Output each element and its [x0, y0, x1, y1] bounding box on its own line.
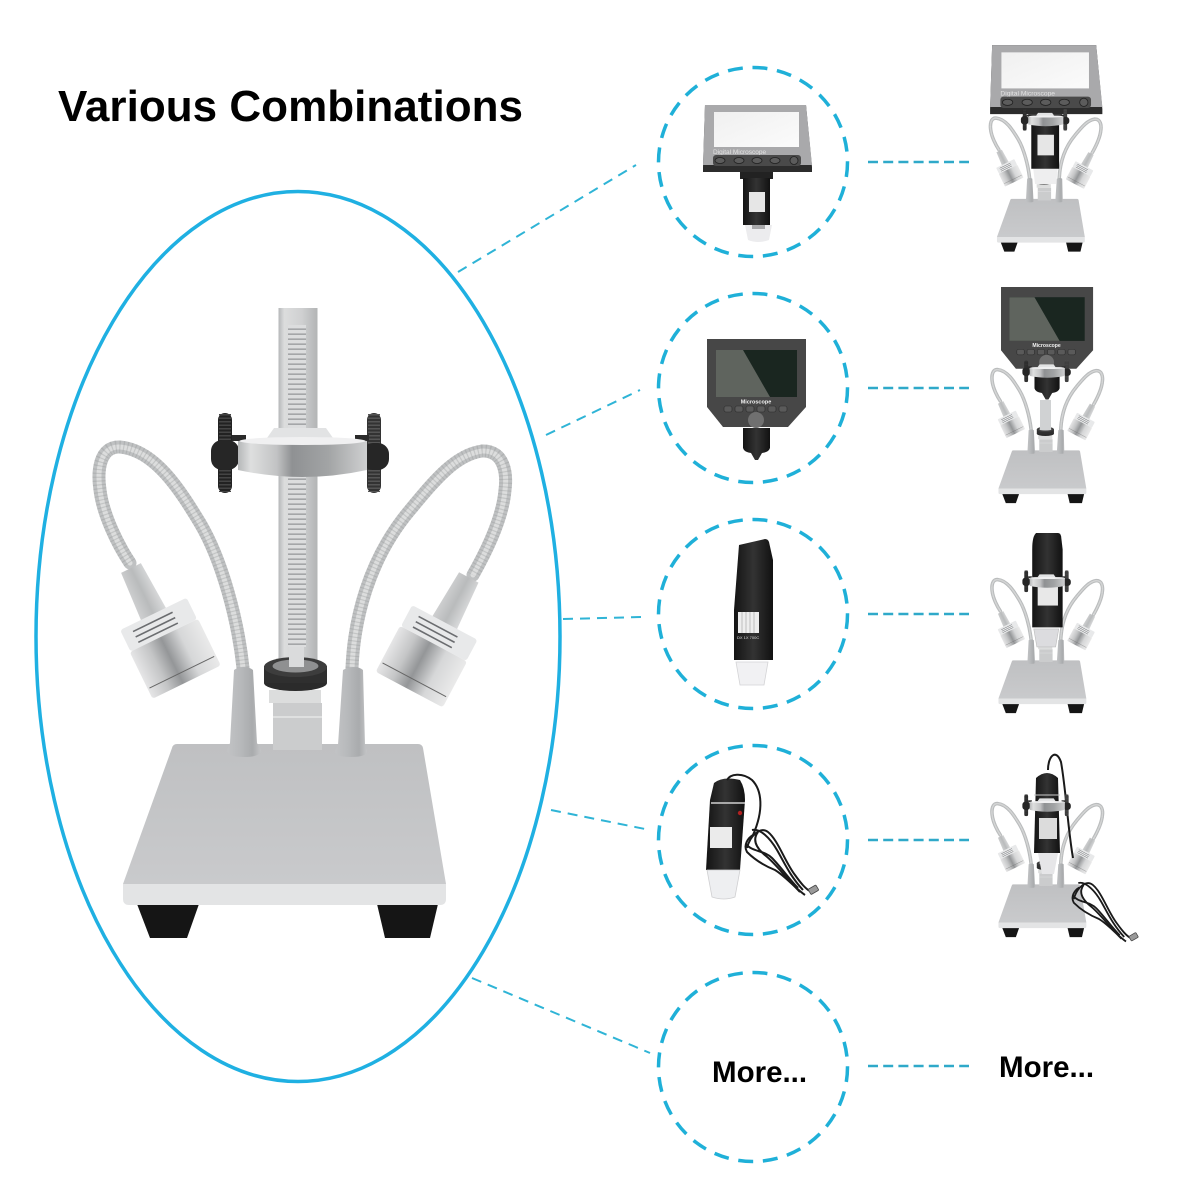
oval: main stand highlight [36, 192, 560, 1082]
combination 4: USB microscope on stand with cable [991, 755, 1138, 942]
device: dark-screen monitor [707, 339, 806, 460]
combination 1: white-screen monitor on stand [990, 45, 1102, 252]
device: white-screen monitor: Digital Microscope [713, 149, 766, 156]
combination 2: dark-screen monitor on stand [991, 287, 1103, 503]
diagonal dashed connectors [458, 165, 650, 1053]
label: more on right: More... [999, 1051, 1094, 1084]
device: wireless handheld microscope [734, 539, 773, 685]
main stand illustration [97, 308, 506, 938]
combination 2: dark-screen monitor on stand: Microscope [1032, 343, 1061, 349]
horizontal dashed connectors [868, 162, 969, 1066]
label: more in circle: More... [712, 1056, 807, 1089]
column with rack [278, 308, 318, 666]
base, gooseneck lamps and feet [97, 447, 506, 938]
title: Various Combinations [58, 82, 523, 131]
device: dark-screen monitor: Microscope [741, 400, 771, 406]
dashed circles [658, 68, 848, 1162]
device: wireless handheld microscope: DX 1X 700C [737, 635, 759, 640]
combination 1: white-screen monitor on stand: Digital Microscope [1000, 91, 1055, 98]
rack end block [289, 647, 304, 667]
ring clamp with knobs [211, 413, 389, 493]
combination 3: wireless microscope on stand [991, 533, 1103, 713]
device: USB microscope with cable [706, 775, 819, 899]
device: white-screen monitor [703, 105, 812, 242]
